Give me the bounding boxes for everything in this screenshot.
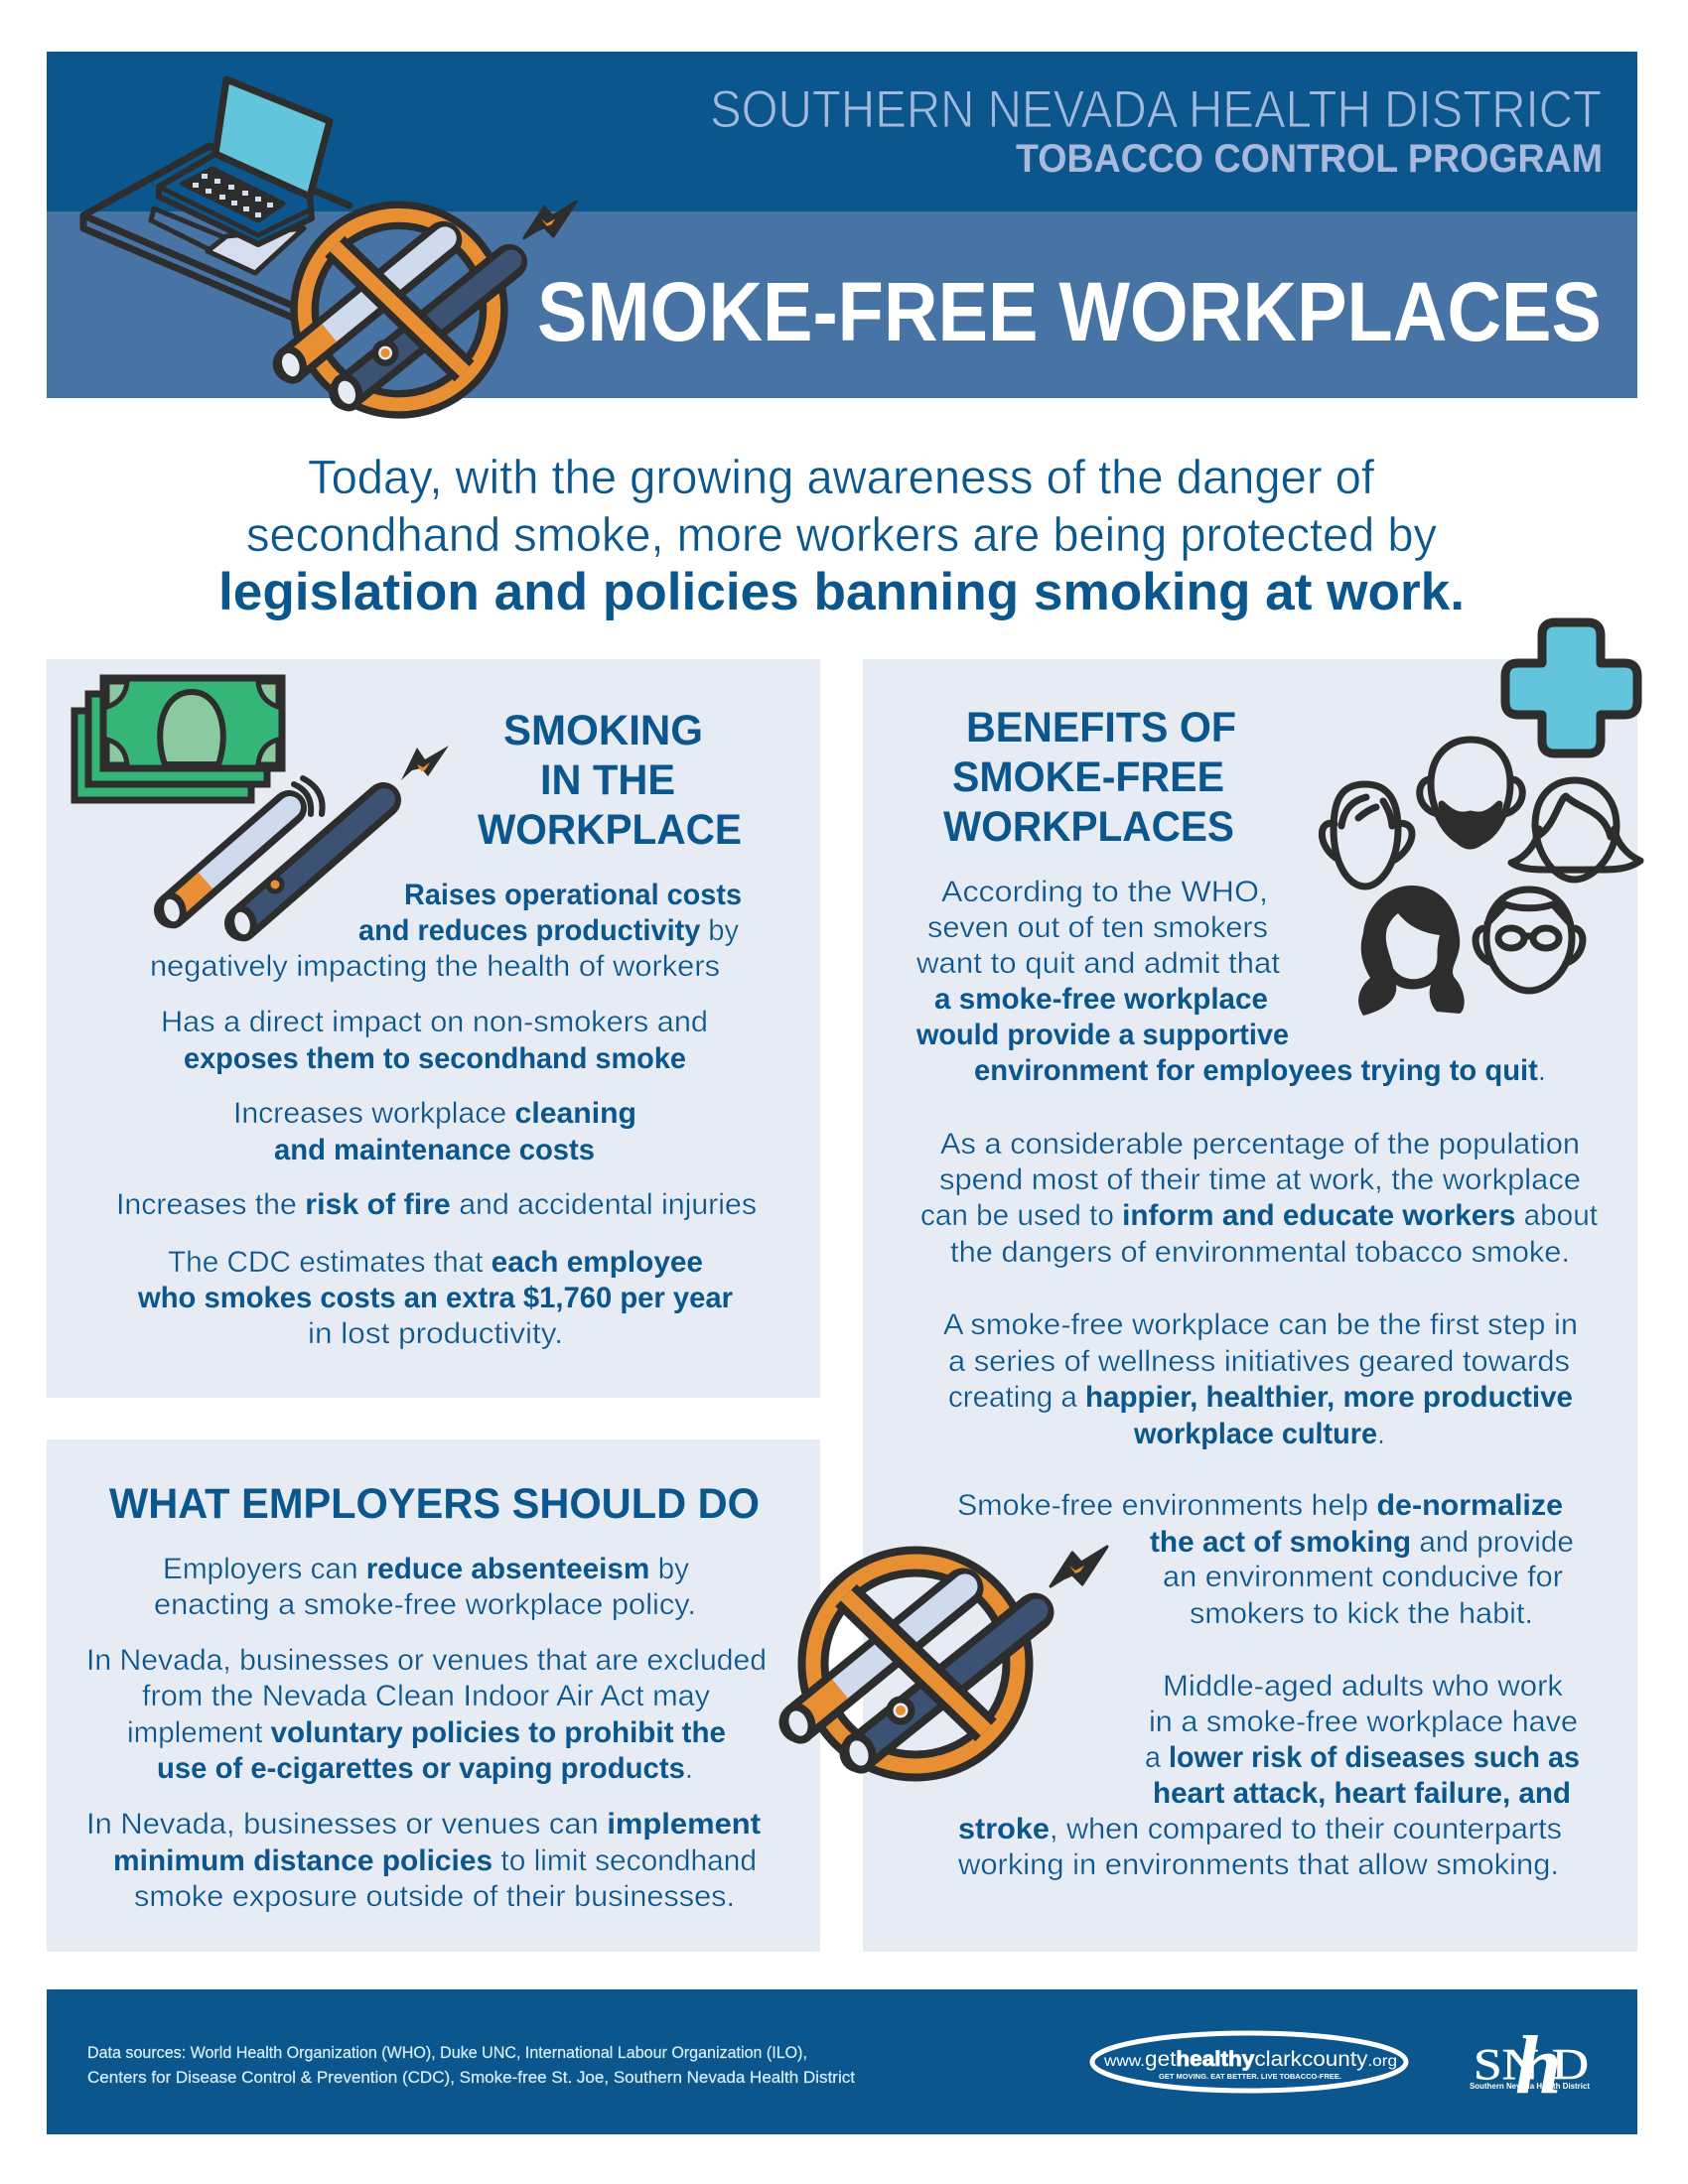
text: workplace smoking impacts: Increases workplace cleaning (233, 1097, 636, 1130)
text: benefits paragraph 4: an environment conducive for (1163, 1561, 1563, 1593)
heading: smoking in the workplace: IN THE (540, 756, 675, 804)
text: workplace smoking impacts (116, 879, 757, 1350)
text: benefits paragraph 5: working in environments that allow smoking. (957, 1848, 1559, 1881)
text: employer actions (86, 1553, 767, 1913)
text: workplace smoking impacts: who smokes costs an extra $1,760 per year (137, 1282, 733, 1314)
header organization name: SOUTHERN NEVADA HEALTH DISTRICT (710, 80, 1602, 139)
text: employer actions: from the Nevada Clean Indoor Air Act may (142, 1680, 710, 1712)
intro statement: legislation and policies banning smoking at work. (218, 563, 1465, 621)
text: benefits paragraph 4: the act of smoking and provide (1150, 1526, 1574, 1559)
logo: get healthy clark county: GET MOVING. EAT BETTER. LIVE TOBACCO-FREE. (1159, 2072, 1341, 2081)
text: workplace smoking impacts: Has a direct impact on non-smokers and (161, 1006, 708, 1038)
text: workplace smoking impacts: exposes them to secondhand smoke (184, 1042, 686, 1075)
header banner (47, 52, 1637, 398)
text: employer actions: In Nevada, businesses or venues can implement (86, 1808, 761, 1841)
text: employer actions: In Nevada, businesses or venues that are excluded (86, 1644, 767, 1677)
data sources: Centers for Disease Control & Prevention (CDC), Smoke-free St. Joe, Southern Nevada Health District (87, 2068, 855, 2087)
text: benefits paragraph 5: in a smoke-free workplace have (1149, 1706, 1578, 1738)
text: employer actions: use of e-cigarettes or vaping products. (157, 1752, 693, 1785)
text: benefits paragraph 2: As a considerable percentage of the population (940, 1128, 1580, 1160)
text: employer actions: enacting a smoke-free workplace policy. (154, 1588, 696, 1621)
text: benefits paragraph 2 (920, 1128, 1599, 1269)
head: woman with dark hair (1358, 886, 1465, 1016)
panel: what employers should do (47, 1439, 820, 1952)
icon: group of people (1322, 740, 1640, 1016)
text: benefits paragraph 5 (957, 1670, 1580, 1881)
text: benefits paragraph 1 (915, 876, 1546, 1087)
text: employer actions: implement voluntary policies to prohibit the (127, 1716, 726, 1749)
text: employer actions: smoke exposure outside of their businesses. (134, 1880, 735, 1913)
text: benefits paragraph 1: want to quit and admit that (915, 947, 1281, 980)
logo: SNHD: h (1515, 2019, 1562, 2112)
text: benefits paragraph 2: can be used to inform and educate workers about (920, 1199, 1599, 1232)
text: benefits paragraph 1: seven out of ten smokers (927, 911, 1268, 944)
heading: benefits: BENEFITS OF (966, 704, 1236, 751)
text: benefits paragraph 5: a lower risk of diseases such as (1145, 1741, 1580, 1774)
intro statement: secondhand smoke, more workers are being protected by (246, 509, 1437, 562)
text: workplace smoking impacts: in lost productivity. (308, 1317, 563, 1350)
text: benefits paragraph 1: According to the WHO, (941, 876, 1268, 908)
head: bald man (1322, 784, 1412, 887)
heading: smoking in the workplace: WORKPLACE (478, 806, 742, 854)
logo: SNHD: Southern Nevada Health District (1470, 2082, 1590, 2091)
head: bearded man (1420, 740, 1522, 846)
title: SMOKE-FREE WORKPLACES (537, 265, 1602, 358)
icon: no smoking sign (benefits panel) (780, 1547, 1107, 1773)
heading: benefits (943, 704, 1236, 851)
data sources: Data sources: World Health Organization (WHO), Duke UNC, International Labour Organization (ILO), (87, 2043, 807, 2062)
text: benefits paragraph 3: workplace culture. (1133, 1418, 1385, 1450)
text: benefits paragraph 2: spend most of their time at work, the workplace (939, 1163, 1581, 1196)
text: workplace smoking impacts: Increases the risk of fire and accidental injuries (116, 1188, 757, 1221)
heading: smoking in the workplace: SMOKING (503, 707, 703, 754)
text: employer actions: Employers can reduce absenteeism by (163, 1553, 689, 1585)
logo: SNHD: SN D (1474, 2040, 1589, 2089)
heading: benefits: WORKPLACES (943, 803, 1234, 851)
text: benefits paragraph 1: a smoke-free workplace (934, 983, 1268, 1016)
icon: medical plus (1505, 622, 1637, 753)
intro statement: Today, with the growing awareness of the danger of (308, 452, 1375, 504)
text: workplace smoking impacts: Raises operational costs (404, 879, 742, 911)
text: benefits paragraph 5: stroke, when compared to their counterparts (958, 1813, 1562, 1845)
text: benefits paragraph 5: Middle-aged adults who work (1163, 1670, 1564, 1703)
footer (47, 1989, 1637, 2134)
head: woman with bob (1511, 780, 1640, 880)
program name: TOBACCO CONTROL PROGRAM (1016, 137, 1603, 181)
heading: benefits: SMOKE-FREE (952, 753, 1224, 801)
logo: get healthy clark county: www.gethealthy clarkcounty .org (1103, 2048, 1397, 2071)
heading: what employers should do: WHAT EMPLOYERS SHOULD DO (109, 1480, 760, 1528)
text: benefits paragraph 4 (957, 1489, 1574, 1630)
text: benefits paragraph 3 (943, 1308, 1578, 1450)
text: benefits paragraph 4: smokers to kick the habit. (1190, 1597, 1533, 1630)
text: workplace smoking impacts: and reduces productivity by (358, 914, 739, 947)
text: benefits paragraph 3: A smoke-free workplace can be the first step in (943, 1308, 1578, 1341)
panel: smoking in the workplace (47, 659, 820, 1398)
text: benefits paragraph 1: environment for employees trying to quit. (974, 1054, 1546, 1087)
text: benefits paragraph 4: Smoke-free environments help de-normalize (957, 1489, 1563, 1522)
icon: e-cigarette (227, 746, 449, 940)
logo: get healthy clark county (1092, 2033, 1406, 2091)
panel: benefits of smoke-free workplaces (863, 659, 1637, 1952)
icon: cigarette (157, 778, 323, 927)
text: employer actions: minimum distance policies to limit secondhand (113, 1844, 757, 1877)
text: benefits paragraph 2: the dangers of environmental tobacco smoke. (950, 1236, 1570, 1269)
icon: no smoking sign (header) (274, 202, 576, 411)
text: workplace smoking impacts: and maintenance costs (274, 1134, 595, 1166)
text: benefits paragraph 3: creating a happier, healthier, more productive (948, 1381, 1573, 1414)
logo: SNHD (1470, 2019, 1590, 2112)
heading: smoking in the workplace (478, 707, 742, 854)
icon: money stack (74, 678, 282, 800)
intro statement (218, 452, 1465, 621)
head: man with glasses (1476, 889, 1583, 991)
text: benefits paragraph 1: would provide a supportive (915, 1019, 1289, 1051)
icon: laptop on desk (83, 79, 350, 318)
data sources (87, 2043, 855, 2087)
text: workplace smoking impacts: The CDC estimates that each employee (168, 1246, 703, 1279)
text: workplace smoking impacts: negatively impacting the health of workers (150, 950, 720, 983)
text: benefits paragraph 5: heart attack, heart failure, and (1153, 1777, 1571, 1810)
text: benefits paragraph 3: a series of wellness initiatives geared towards (948, 1345, 1570, 1378)
